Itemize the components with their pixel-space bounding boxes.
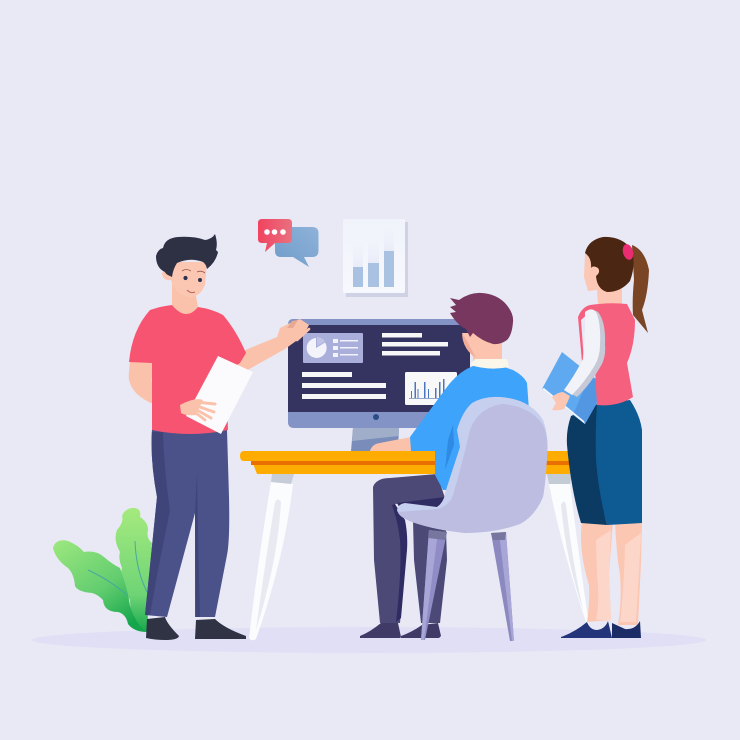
plant: [53, 508, 152, 632]
legs: [581, 520, 642, 625]
person: presenting man: [129, 234, 309, 640]
scrunchie: [621, 243, 635, 261]
right arm and raised hand: [234, 319, 309, 372]
icon: chat bubbles: [258, 219, 318, 267]
sleeve: [564, 309, 605, 397]
neck and face: [584, 253, 622, 305]
top: [578, 303, 635, 405]
skirt: [567, 400, 642, 525]
hand: [552, 392, 570, 410]
person: standing woman: [542, 237, 649, 638]
chair legs: [421, 530, 514, 641]
floor shadow: [32, 627, 706, 653]
collar: [470, 359, 509, 369]
shoes: [360, 623, 441, 638]
dashboard widget: [303, 333, 363, 363]
monitor stand: [351, 428, 399, 451]
neck and face: [462, 333, 502, 361]
mini chart: [405, 372, 457, 405]
chair shell: [397, 397, 548, 533]
hand on paper: [180, 399, 215, 420]
monitor body: [288, 319, 470, 428]
left arm: [129, 360, 186, 414]
sweater: [410, 364, 529, 490]
table leg: left: [249, 474, 294, 640]
paper: [186, 356, 253, 434]
hair: [450, 293, 513, 344]
person: seated man: [360, 293, 548, 641]
hair: [156, 234, 218, 277]
ponytail: [632, 245, 649, 333]
trousers rear leg: [413, 520, 447, 623]
pants: [145, 430, 229, 617]
hair: [585, 237, 634, 292]
neck and face: [162, 262, 207, 314]
computer monitor: [288, 319, 470, 451]
near hand: [370, 437, 411, 451]
icon: bar chart card: [343, 219, 408, 297]
table top: [240, 451, 571, 474]
shoes: [561, 621, 641, 638]
t-shirt: [129, 305, 246, 434]
table: [240, 451, 589, 640]
shoes: [146, 617, 246, 640]
table leg: right: [547, 474, 589, 625]
folder: [542, 352, 606, 424]
trousers front leg: [373, 474, 445, 623]
text lines: [302, 333, 448, 399]
far arm: [433, 440, 452, 451]
